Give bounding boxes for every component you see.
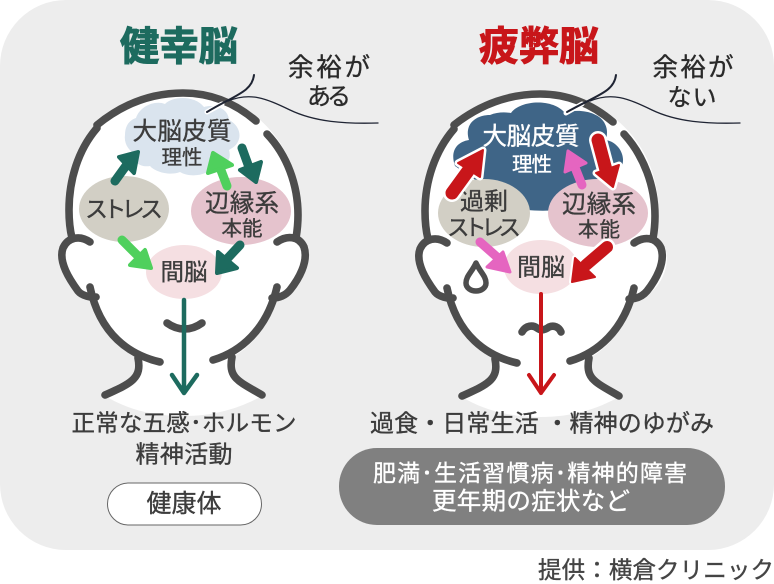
label: reason: 理性 [162,146,202,170]
label: cerebral cortex: 大脳皮質 [482,122,580,150]
label: no room second line: ない [668,84,716,112]
label: instinct: 本能 [222,218,262,240]
cerebral cortex cloud [125,98,240,175]
label: cerebral cortex: 大脳皮質 [132,118,232,146]
diseases pill [339,448,725,525]
stress ellipse [438,179,530,247]
title: healthy brain: 健幸脳 [120,25,238,69]
arrow down to body [529,294,554,393]
label: stress: ストレス [447,216,521,240]
label: has room: 余裕が [288,54,370,82]
stress ellipse [79,176,169,242]
limbic ellipse [548,179,648,247]
diseases pill: 更年期の症状など [432,488,630,516]
text: mental activity: 精神活動 [136,442,232,468]
midbrain ellipse [504,240,578,294]
title: tired brain: 疲弊脳 [479,25,599,69]
right panel: tired brain [339,25,740,525]
label: limbic system: 辺縁系 [205,190,279,218]
callout line [566,75,740,123]
label: midbrain: 間脳 [517,254,565,282]
limbic ellipse [191,177,291,245]
wavy mouth [522,326,561,332]
diseases pill: 肥満･生活習慣病･精神的障害 [373,460,687,486]
label: limbic system: 辺縁系 [562,190,636,218]
label: no room: 余裕が [652,54,734,82]
arrow: cortex to limbic [596,140,619,187]
arrow: limbic to cortex [565,151,586,185]
arrow: stress to cortex [452,150,483,193]
arrow: limbic to midbrain [572,247,607,282]
arrow: stress to midbrain [480,242,510,272]
label: excess: 過剰 [460,188,508,216]
head outline left [60,91,308,416]
callout line [207,75,378,123]
label: reason: 理性 [512,154,552,176]
left panel: healthy brain [60,25,378,525]
arrow: limbic to midbrain [217,245,240,273]
healthy body pill: 健康体 [146,490,222,518]
label: stress: ストレス [85,196,163,222]
icon: sweat drop [466,263,486,291]
cerebral cortex dark cloud [453,102,623,211]
arrow: stress to cortex [115,152,138,181]
arrow: cortex to limbic [240,148,261,182]
label: has room second line: ある [307,84,351,110]
midbrain ellipse [146,245,222,299]
arrow down to body [172,300,197,393]
healthy body pill [108,483,262,525]
mouth [167,323,202,329]
arrow: stress to midbrain [122,240,151,268]
text: overeating and lifestyle: 過食・日常生活 ・精神のゆがみ [370,410,714,438]
label: instinct: 本能 [578,218,620,242]
credit: 提供：横倉クリニック [538,557,774,583]
label: midbrain: 間脳 [160,259,208,285]
head outline right [417,92,667,417]
text: normal senses: 正常な五感･ホルモン [72,410,296,436]
arrow: limbic to cortex [208,153,232,186]
